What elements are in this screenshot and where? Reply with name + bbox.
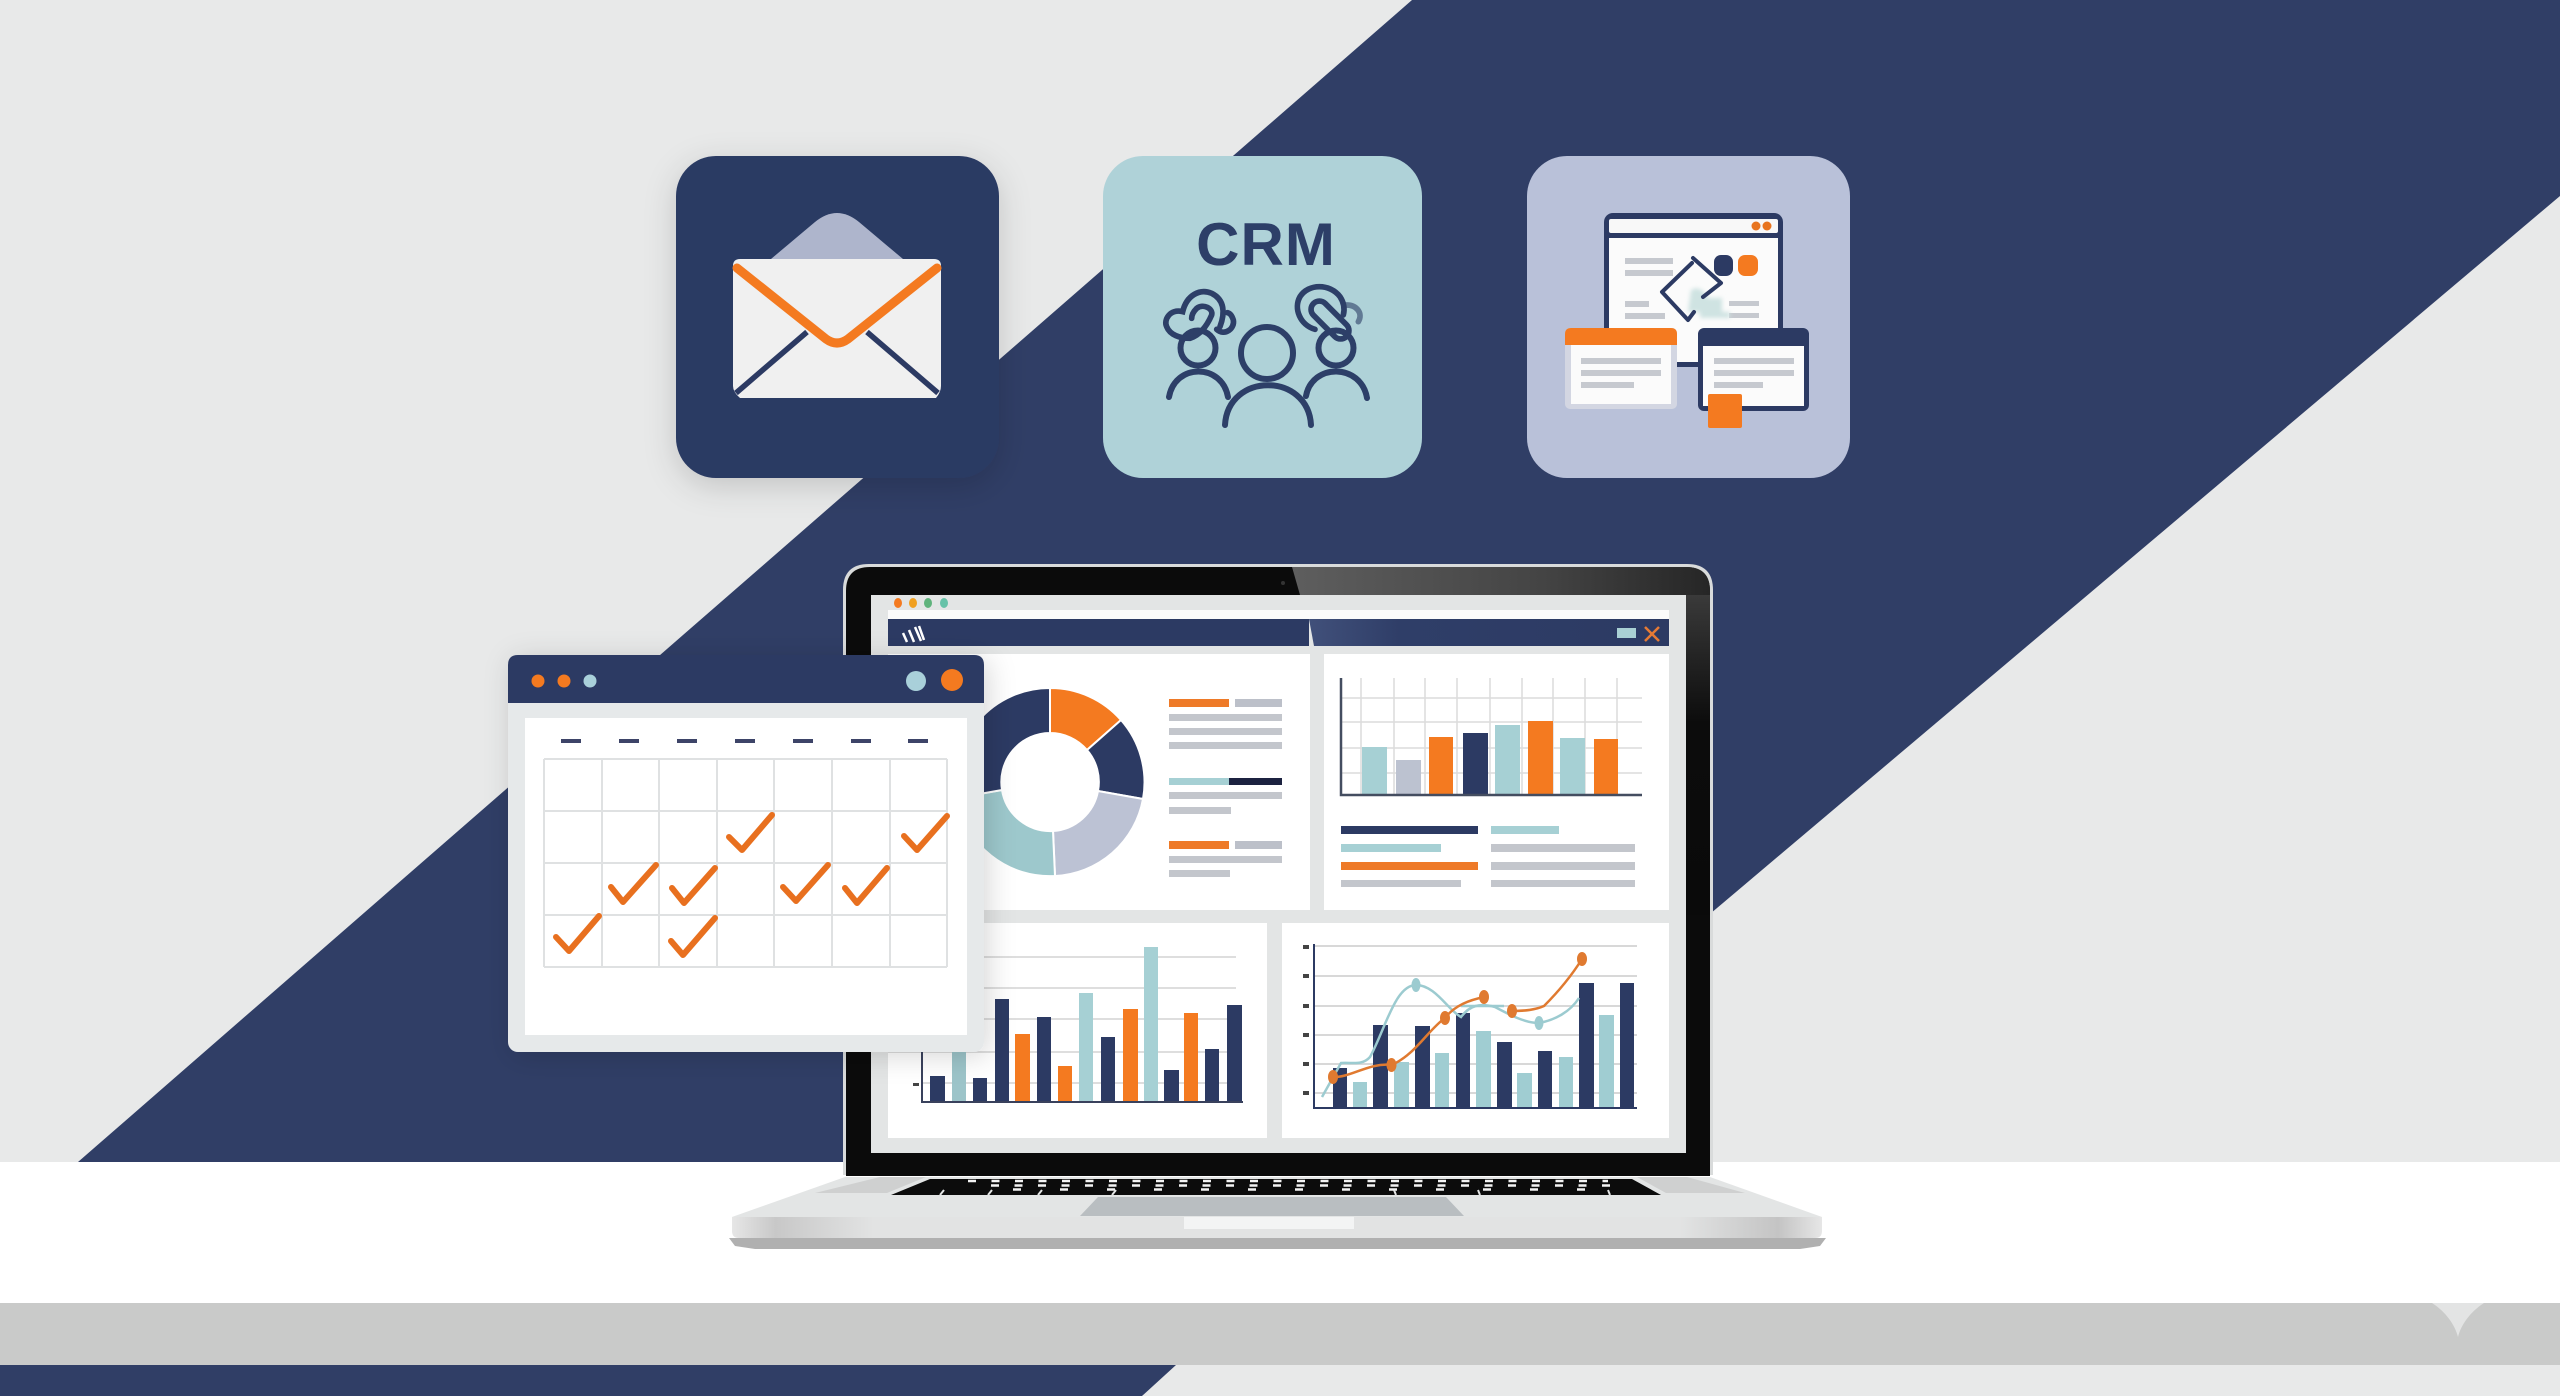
icon: web windows — [1527, 156, 1850, 478]
donut — [956, 688, 1145, 876]
icon: CRM — [1103, 156, 1422, 478]
bars — [930, 947, 1242, 1102]
legend bars — [1169, 699, 1282, 877]
columns — [1362, 721, 1618, 795]
panel: combo chart — [1282, 923, 1669, 1138]
teal line — [1322, 978, 1579, 1097]
speaker grills — [815, 1177, 1745, 1193]
main window — [1604, 213, 1783, 367]
bars — [1333, 983, 1634, 1107]
trackpad — [1080, 1197, 1464, 1216]
chart grid — [1314, 946, 1637, 1093]
window dots — [894, 598, 948, 608]
camera — [1281, 581, 1285, 585]
icon: email — [676, 156, 999, 478]
laptop lid — [843, 564, 1713, 1176]
weekday dashes — [561, 739, 928, 743]
navy card — [1698, 328, 1809, 428]
panel: donut chart — [888, 654, 1310, 910]
keyboard — [891, 1179, 1661, 1195]
calendar title bar — [508, 655, 984, 703]
legend bars — [1341, 826, 1635, 887]
calendar grid — [544, 759, 947, 967]
desk shelf — [0, 1162, 2560, 1396]
orange line — [1328, 952, 1587, 1084]
chart grid — [888, 957, 1236, 1083]
laptop — [729, 564, 1826, 1249]
CRM label: CRM — [1196, 211, 1336, 278]
people with chain links — [1166, 287, 1367, 425]
orange card — [1565, 328, 1677, 409]
panel: bar chart — [888, 923, 1267, 1138]
chart grid — [1341, 678, 1642, 795]
calendar window — [508, 655, 984, 1052]
app bar — [888, 619, 1669, 646]
check marks — [556, 815, 947, 955]
laptop screen — [871, 595, 1686, 1153]
panel: column chart — [1324, 654, 1669, 910]
axis ticks — [1303, 945, 1309, 1095]
laptop base — [729, 1177, 1826, 1249]
front notch — [1184, 1217, 1354, 1229]
